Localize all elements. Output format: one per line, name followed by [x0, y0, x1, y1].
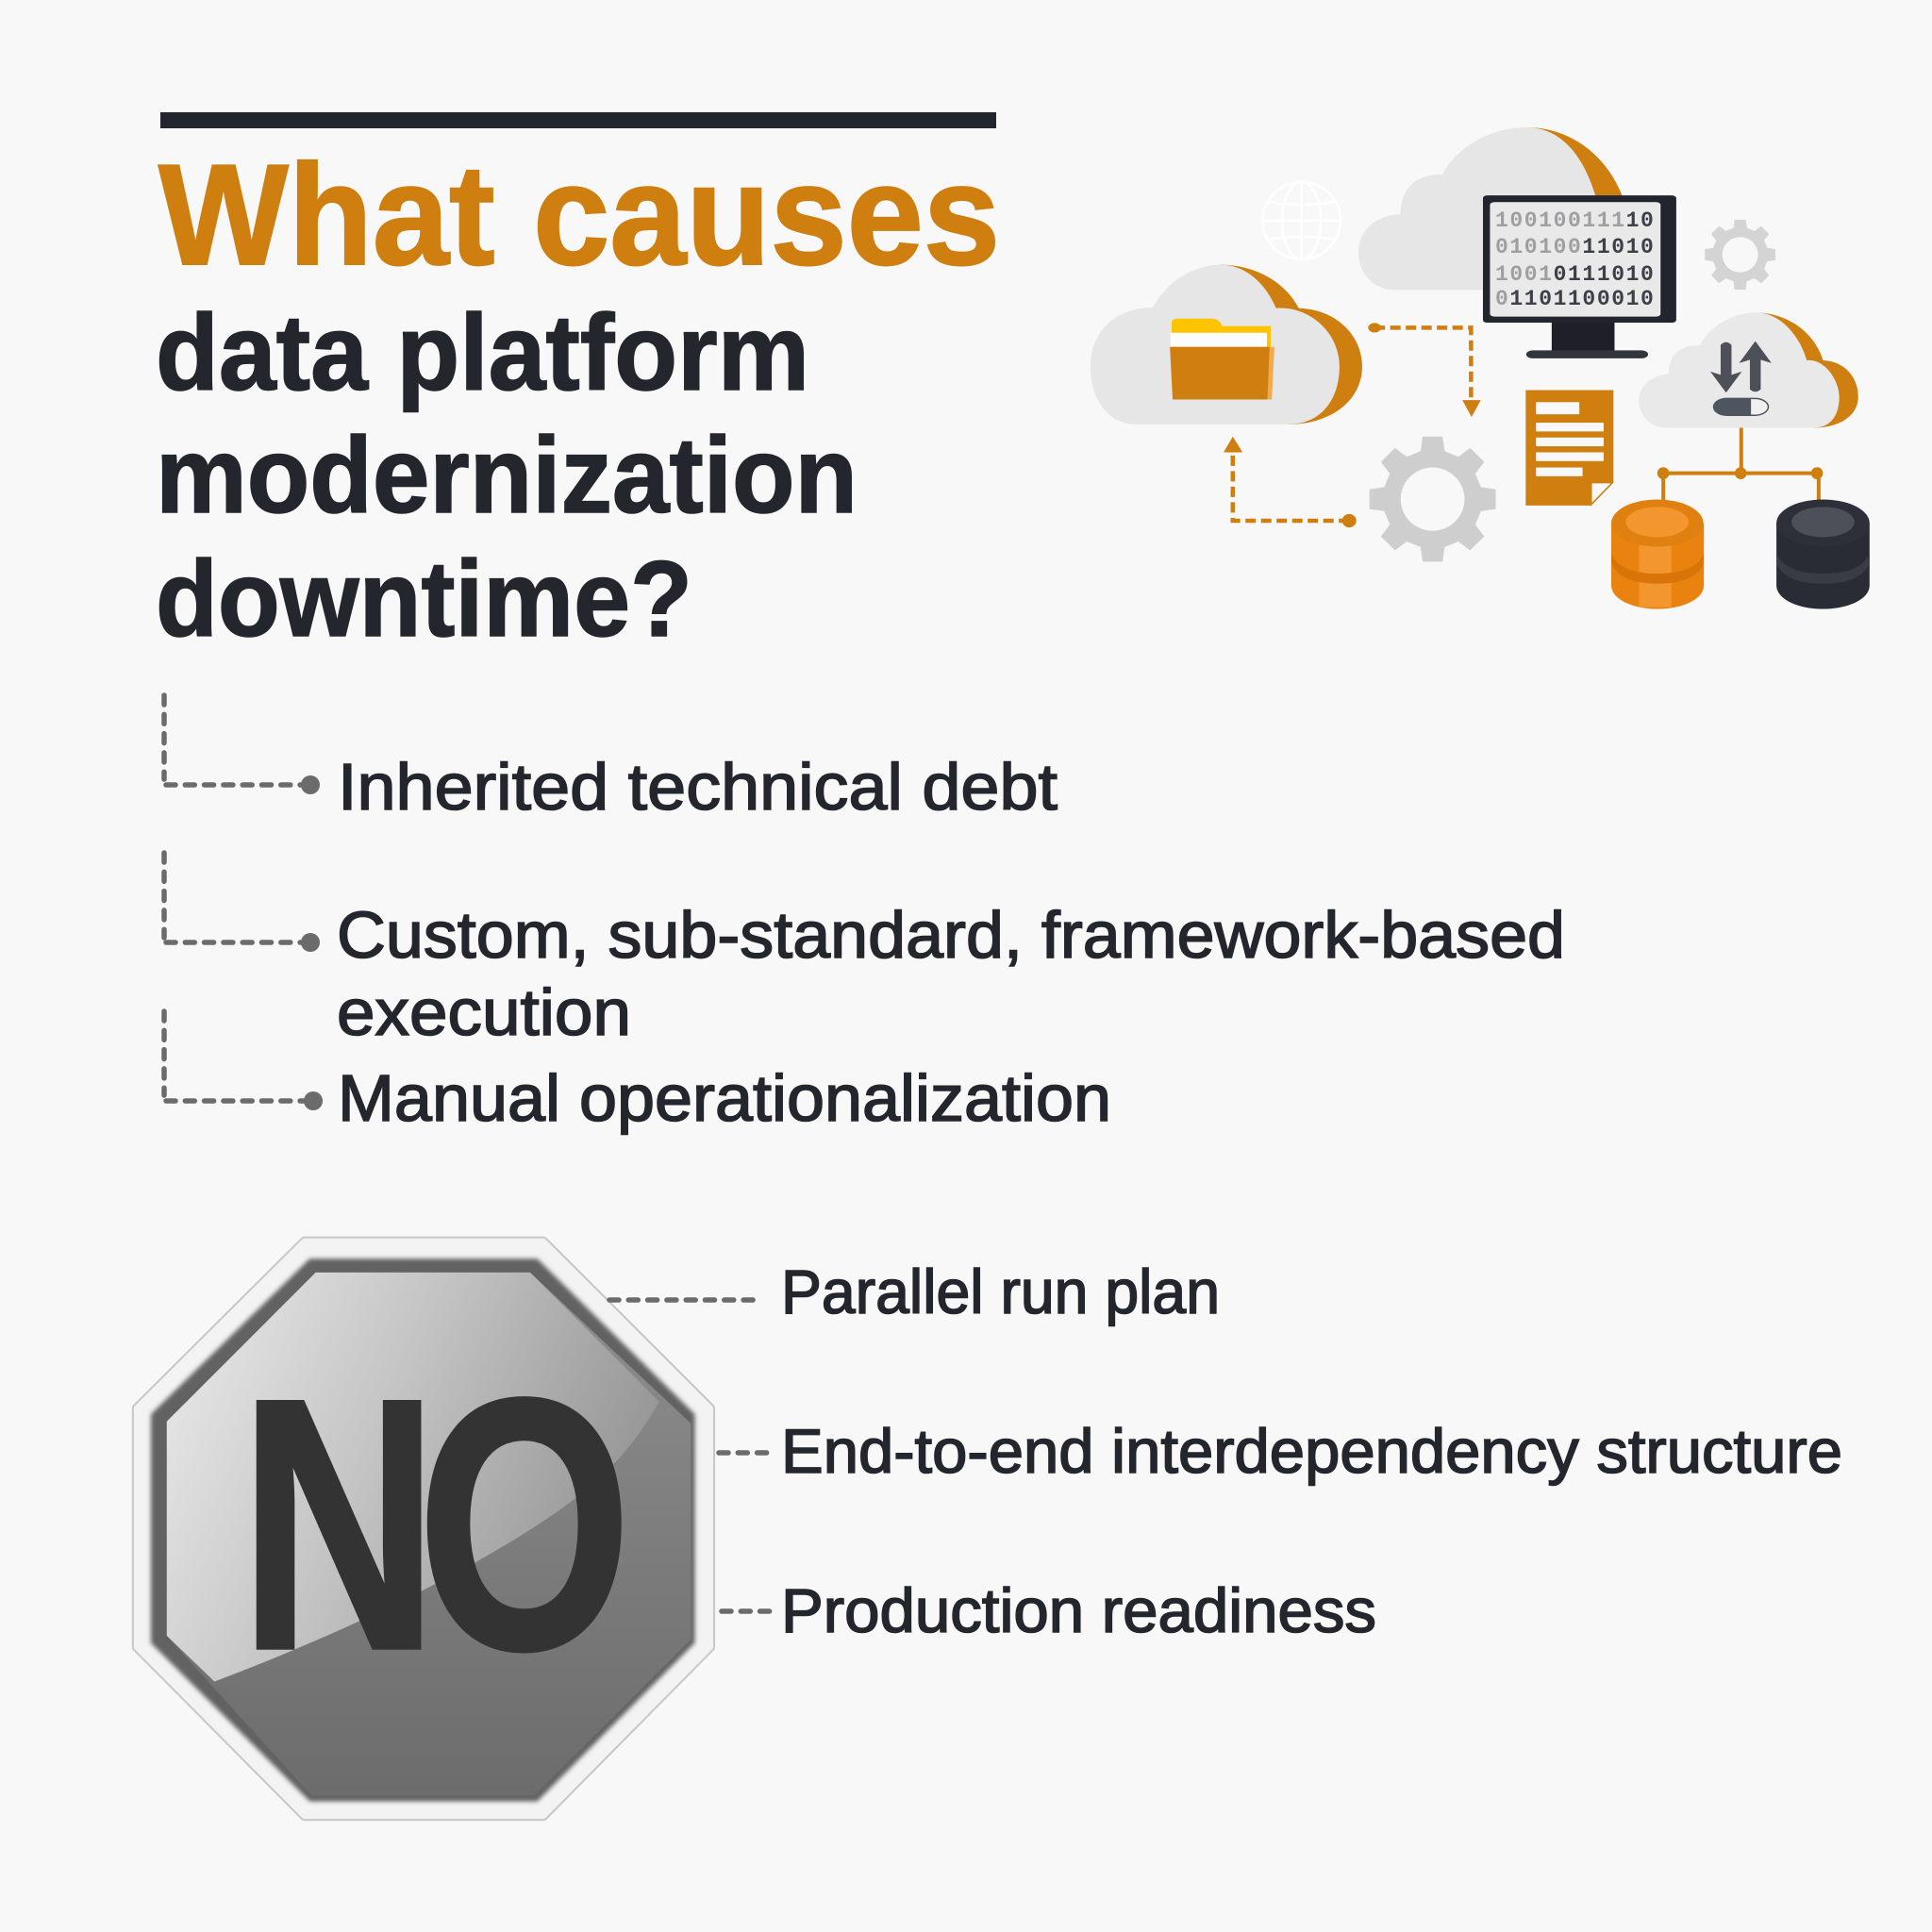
icon: small gear: [1705, 220, 1775, 290]
list: causes: [164, 695, 1565, 1135]
icon: document: [1525, 390, 1613, 506]
cause 2: Custom, sub-standard, framework-based: [337, 898, 1565, 972]
title: [156, 135, 1000, 659]
icon: globe: [1262, 182, 1341, 259]
callout text 1: Parallel run plan: [781, 1257, 1220, 1326]
callout line 1: [609, 1297, 755, 1303]
binary text on monitor: 01101100010: [1495, 287, 1655, 311]
sign outer rim: [137, 1241, 710, 1816]
arrow: cloud to document: [1368, 323, 1481, 417]
illustration: cloud data platform: [1091, 127, 1870, 609]
icon: toggle: [1714, 398, 1768, 415]
sign text: NO: [240, 1324, 624, 1724]
title highlight: What causes: What causes: [158, 135, 1000, 295]
connector tree: [1657, 427, 1823, 501]
icon: dark database: [1776, 499, 1870, 609]
sign inner rim: [137, 1241, 710, 1816]
title line: modernization: modernization: [156, 416, 858, 536]
binary text on monitor: [1495, 208, 1655, 311]
binary text on monitor: 10010011110: [1495, 208, 1655, 233]
cause 2: execution: [337, 975, 631, 1049]
arrow: gear to cloud: [1224, 437, 1357, 527]
icon: folder: [1170, 319, 1274, 399]
sign face: [167, 1273, 691, 1796]
list: callouts: [609, 1257, 1842, 1645]
icon: right cloud with transfer arrows: [1639, 312, 1858, 427]
binary text on monitor: 01010011010: [1495, 235, 1655, 259]
icon: large gear: [1370, 437, 1496, 561]
callout text 2: End-to-end interdependency structure: [781, 1416, 1842, 1486]
callout line 3: [722, 1608, 770, 1614]
icon: orange database: [1611, 499, 1704, 609]
cause 2: [337, 898, 1565, 1049]
title line: data platform: data platform: [156, 293, 809, 413]
connector 3: [164, 1011, 323, 1110]
icon: monitor: [1483, 195, 1676, 358]
binary text on monitor: 10010111010: [1495, 262, 1655, 287]
sign gloss: [167, 1273, 659, 1681]
title line: downtime?: downtime?: [156, 540, 692, 659]
connector 2: [164, 853, 320, 952]
callout line 2: [719, 1450, 769, 1456]
icon: down and up arrows: [1710, 341, 1772, 392]
callout text 3: Production readiness: [781, 1575, 1376, 1645]
cause 3: Manual operationalization: [338, 1061, 1111, 1135]
top rule: [160, 112, 996, 128]
icon: top cloud: [1358, 127, 1624, 290]
connector 1: [164, 695, 320, 794]
icon: left cloud with folder: [1091, 265, 1362, 425]
icon: NO stop sign: [137, 1241, 710, 1816]
sign bevel: [151, 1258, 695, 1802]
cause 1: Inherited technical debt: [338, 750, 1058, 824]
